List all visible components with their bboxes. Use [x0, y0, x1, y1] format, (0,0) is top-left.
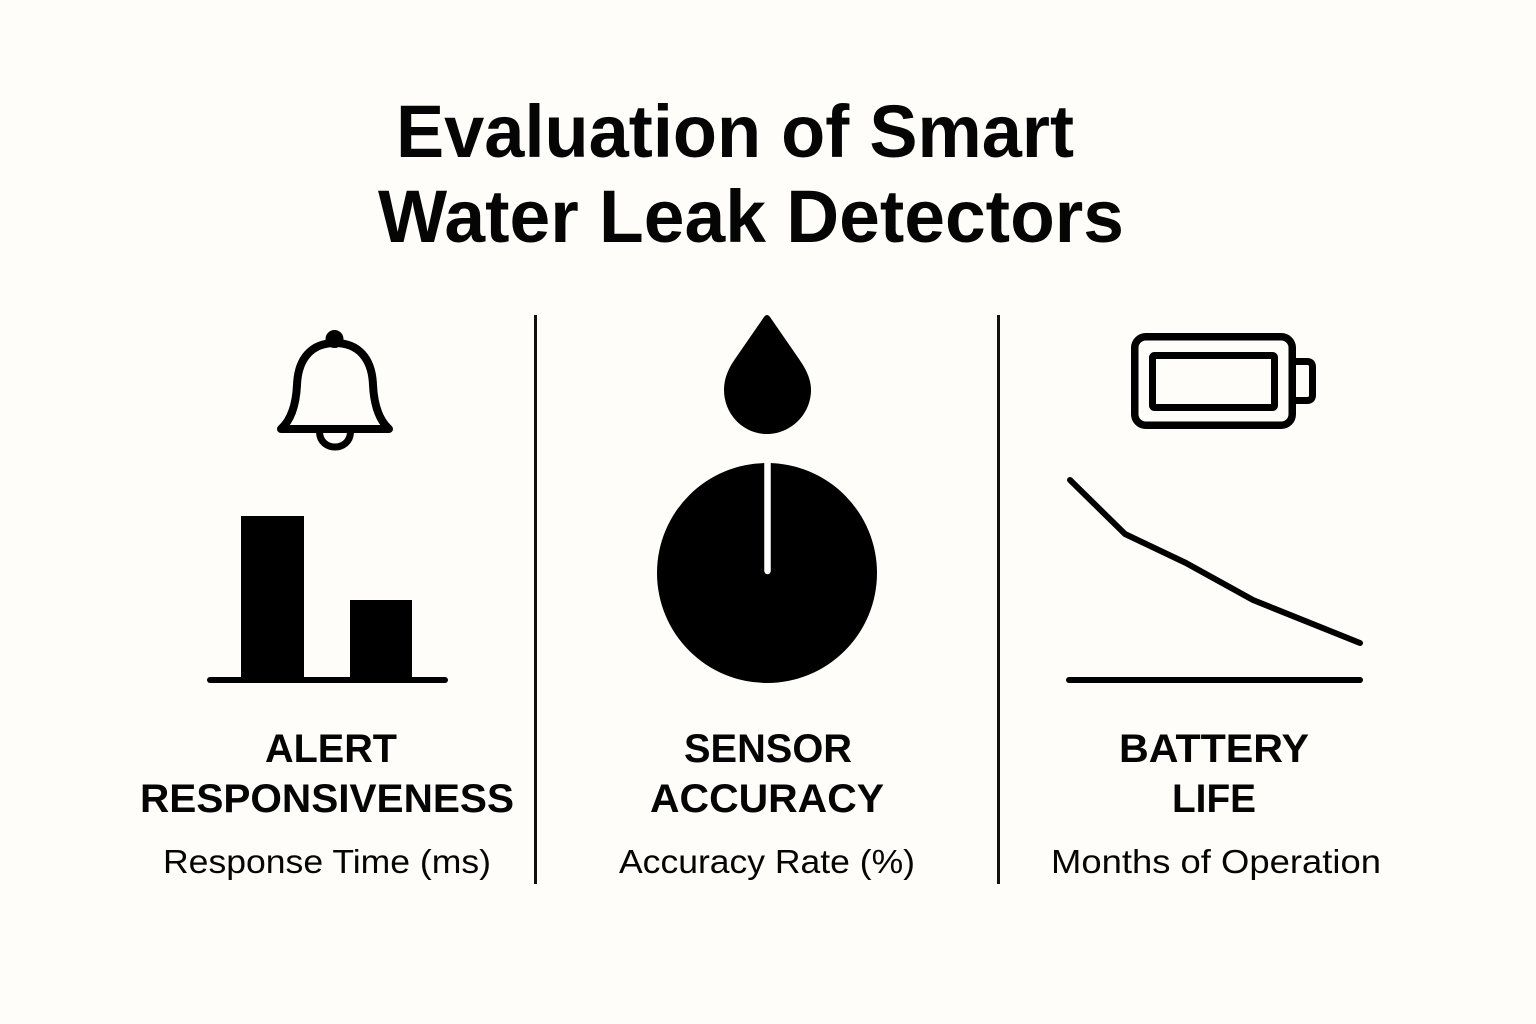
heading: battery life: [1119, 727, 1309, 821]
subtitle: months of operation: Months of Operation: [1051, 843, 1381, 880]
divider left: [534, 315, 537, 884]
subtitle: response time: Response Time (ms): [163, 843, 491, 880]
heading: alert responsiveness: ALERT: [265, 727, 397, 771]
icon: water drop: [724, 315, 811, 434]
heading: battery life: LIFE: [1172, 777, 1256, 821]
heading: alert responsiveness: [140, 727, 514, 821]
icon: battery: [1135, 337, 1312, 425]
heading: sensor accuracy: ACCURACY: [650, 777, 884, 821]
icon: bell: [281, 330, 389, 447]
panel: alert responsiveness: [140, 330, 514, 880]
heading: alert responsiveness: RESPONSIVENESS: [140, 777, 514, 821]
heading: sensor accuracy: SENSOR: [684, 727, 852, 771]
pie chart: [657, 460, 877, 683]
line chart: [1069, 480, 1360, 680]
title: Evaluation of Smart: [396, 90, 1074, 173]
title: [378, 90, 1124, 258]
divider right: [997, 315, 1000, 884]
heading: battery life: BATTERY: [1119, 727, 1309, 771]
heading: sensor accuracy: [650, 727, 884, 821]
subtitle: accuracy rate: Accuracy Rate (%): [619, 843, 915, 880]
bar chart: [210, 516, 445, 680]
title: Water Leak Detectors: [378, 175, 1124, 258]
panel: battery life: [1051, 337, 1381, 880]
panel: sensor accuracy: [619, 315, 915, 880]
